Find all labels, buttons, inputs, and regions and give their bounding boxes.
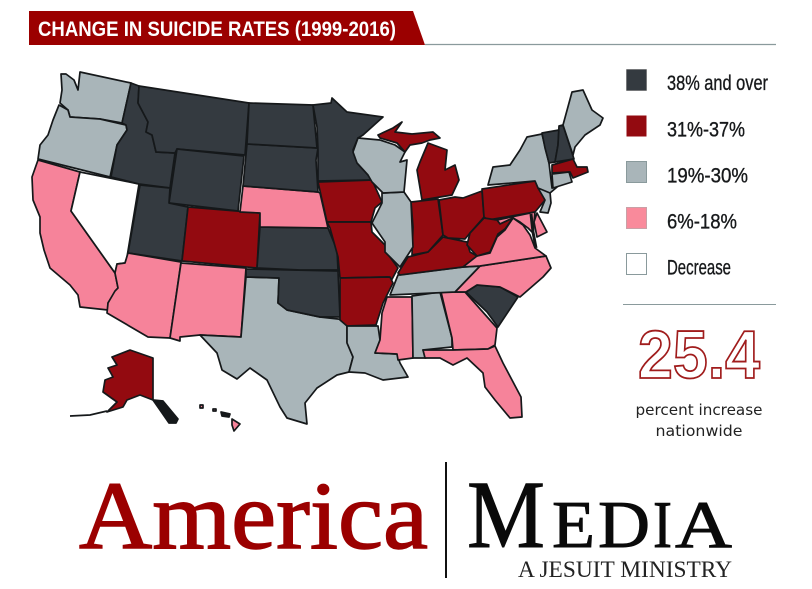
state: Oregon: [38, 105, 127, 177]
stat: 25.4: 25.4: [638, 317, 760, 393]
state: New Jersey: [538, 188, 551, 213]
Chesapeake Bay: [531, 214, 536, 248]
state: Utah: [128, 185, 188, 261]
state: New York: [488, 134, 563, 193]
state: Alaska: [103, 350, 153, 412]
state: North Dakota: [247, 103, 317, 148]
state: New Hampshire: [555, 125, 574, 162]
state: Illinois: [372, 192, 413, 267]
choropleth map of US states: [32, 72, 603, 431]
legend: [626, 70, 768, 280]
legend item: 31%-37%: 31%-37%: [667, 118, 745, 142]
legend item: 19%-30%: [626, 162, 748, 188]
state: Georgia: [441, 292, 497, 350]
legend item: 38% and over: 38% and over: [667, 72, 768, 95]
state: Colorado: [182, 207, 260, 268]
legend item: 6%-18%: 6%-18%: [667, 210, 737, 234]
state: Indiana: [411, 199, 443, 255]
state: New Mexico: [170, 263, 246, 341]
logo word: America: America: [79, 462, 428, 569]
state: Texas: [200, 277, 353, 424]
state: West Virginia: [467, 218, 513, 256]
state: Wisconsin: [353, 138, 407, 193]
state: South Carolina: [466, 285, 518, 327]
state: South Dakota: [243, 144, 318, 192]
legend item: 6%-18%: [626, 208, 737, 234]
state: Arkansas: [340, 277, 393, 326]
state: Connecticut: [552, 172, 572, 188]
logo tagline: A JESUIT MINISTRY: [518, 557, 732, 583]
state: North Carolina: [455, 256, 551, 297]
state: Minnesota: [313, 98, 383, 181]
state: Montana: [138, 86, 249, 155]
state: Ohio: [439, 191, 484, 239]
legend item: 19%-30%: 19%-30%: [667, 164, 748, 188]
state: Tennessee: [390, 266, 480, 295]
stat caption: [636, 401, 762, 440]
state: Kansas: [257, 227, 338, 270]
state: Iowa: [318, 180, 382, 222]
legend item: 38% and over: [626, 70, 768, 95]
stat caption: nationwide: [656, 422, 742, 440]
logo word: Media: A: [675, 488, 732, 562]
state: Michigan upper peninsula: [378, 122, 440, 152]
legend item: 31%-37%: [626, 116, 745, 142]
logo word: Media: D: [598, 488, 650, 562]
state: Idaho: [111, 83, 175, 188]
state: Washington: [60, 72, 131, 123]
Alaska panhandle: [153, 400, 178, 423]
logo: America Media: [79, 461, 732, 583]
state: Louisiana: [347, 326, 408, 380]
state: Florida: [423, 346, 522, 418]
state: Massachusetts: [552, 159, 588, 178]
state: Pennsylvania: [482, 181, 545, 220]
state: Kentucky: [398, 237, 477, 275]
logo word: Media: M: [467, 461, 545, 568]
logo word: Media: E: [552, 488, 595, 562]
state: Wyoming: [169, 149, 244, 211]
title banner: [29, 11, 776, 45]
stat caption: percent increase: [636, 401, 762, 419]
state: Virginia: [463, 218, 546, 267]
title banner: CHANGE IN SUICIDE RATES (1999-2016): [38, 18, 396, 41]
state: Nebraska: [240, 186, 328, 228]
legend item: Decrease: Decrease: [667, 256, 731, 280]
state: Maine: [563, 90, 603, 155]
state: Alabama: [412, 292, 452, 358]
state: Arizona: [107, 253, 181, 338]
logo word: Media: [467, 461, 732, 568]
legend item: Decrease: [626, 254, 731, 280]
Hawaii islands: [200, 405, 240, 431]
state: Nevada: [71, 172, 139, 273]
state: Maryland: [497, 212, 535, 233]
state: Missouri: [327, 222, 398, 283]
state: Oklahoma: [246, 269, 340, 317]
state: Delaware and eastern shore: [534, 213, 547, 237]
Aleutian islands: [70, 411, 107, 416]
state: Mississippi: [375, 297, 413, 360]
state: Michigan lower peninsula: [417, 143, 459, 200]
state: California: [32, 160, 118, 310]
state: Vermont: [542, 130, 559, 163]
logo word: Media: I: [653, 488, 672, 562]
